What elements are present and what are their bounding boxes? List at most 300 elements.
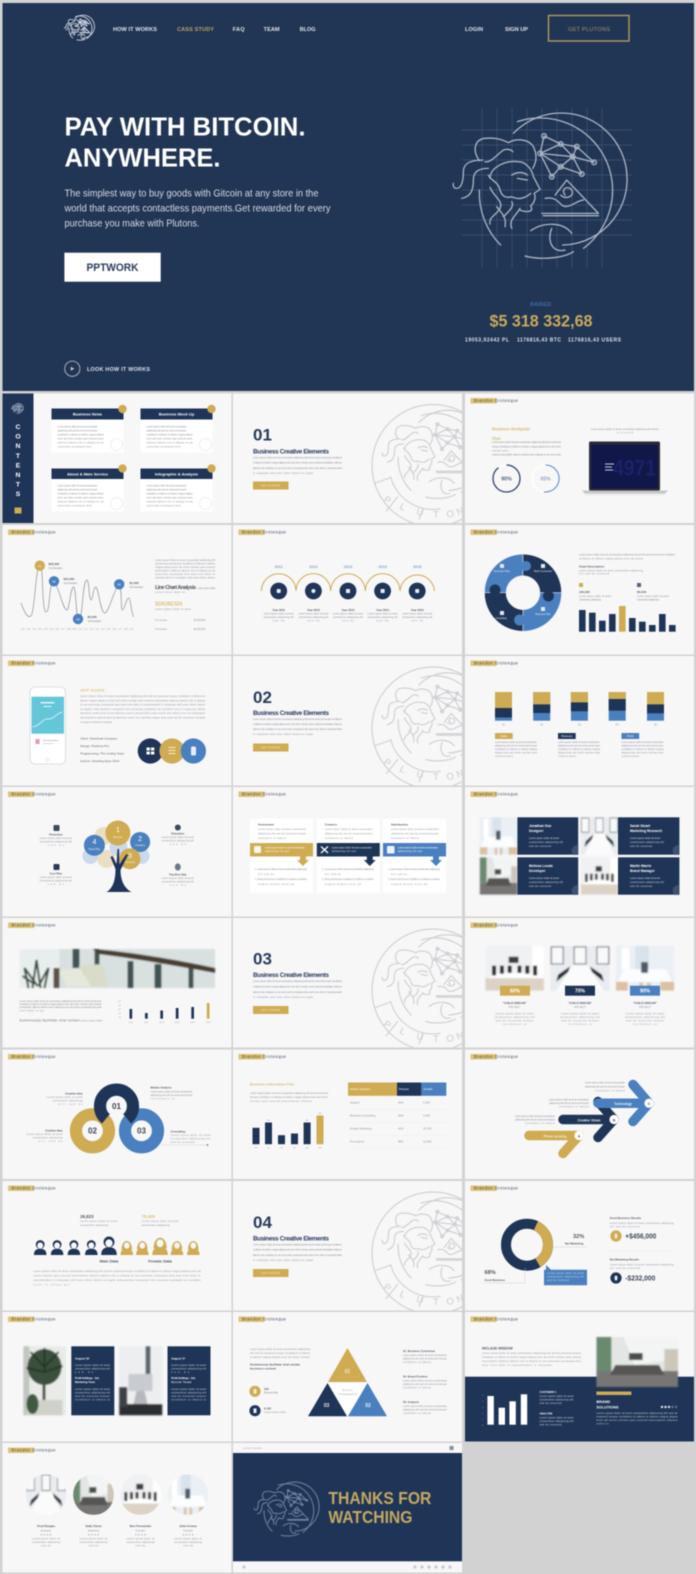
column: creators: incididunt ut labore [325,836,353,840]
hero paragraph: The simplest way to buy goods with Gitcoin at any store in the [64,189,319,200]
result: net marketing: -$232,000 [625,1276,655,1282]
description: reprehenderit in voluptate velit esse cillum dolore eu fugiat nulla pariatur excepteur sint occaecat cupidatat non proident [34,1278,201,1282]
watermark emblem: P [381,1019,393,1031]
team: martin marrix: sed do eiusmod [630,884,653,888]
text card 2: sed do eiusmod tempor [171,1394,206,1398]
bar chart: 06 [319,1148,322,1150]
project: 90 percent: incididunt ut [633,1022,657,1026]
panel: section 03 [232,918,462,1048]
project: 70 percent: incididunt ut [568,1022,592,1026]
callout [544,1265,587,1285]
text card 2: Lorem ipsum dolor sit amet [171,1387,206,1391]
panel: brand solutions slide [465,1312,694,1442]
text card 1: Lorem ipsum dolor sit amet [75,1387,110,1391]
text card 2: consectetur adipiscing elit [171,1366,206,1370]
section description: ut labore et dolore magna aliqua enim ad minim veniam quis nostrud exercitation ullamco [253,984,343,988]
text: arrow c: adipiscing elit sed do eiusmod tempor [585,1084,625,1088]
card: about and main service: Lorem ipsum dolor sit amet consectetur [58,484,98,488]
triangle infographic: Infographics [338,1392,357,1396]
item: education: consectetur adipiscing elit [162,838,194,842]
column: investment: 2. Eiusmod tempor incididunt ut labore et dolore [255,877,308,881]
title: ANYWHERE. [64,145,220,173]
puzzle description: elit sed do eiusmod [579,572,610,576]
column: satisfaction: adipiscing elit sed [398,850,423,853]
contents sidebar: N [16,472,21,479]
text: arrow c: Lorem ipsum dolor sit amet consectetur [585,1080,625,1084]
puzzle description: Lorem ipsum dolor sit amet consectetur adipiscing elit sed do eiusmod tempor incididunt [579,552,675,556]
progress ring 65 [532,465,559,492]
raised total: RAISED [530,302,551,308]
column: creators: adipiscing elit sed do eiusmod tempor [325,832,373,836]
item: education [162,824,194,846]
button: pptwork [64,253,161,282]
panel: three columns slide [233,787,462,916]
item: promotion: sed do [48,843,64,847]
slide header: Brandon Grotesque [12,792,56,796]
interlocking rings: 02 [88,1126,97,1136]
card: infographic and analysis: Lorem ipsum dolor sit amet consectetur [146,484,187,488]
result: good business: Good Business Results [610,1216,642,1220]
label: guideline left [26,1128,63,1143]
watermark emblem: U [415,1294,425,1306]
section title: Business Creative Elements [253,448,329,456]
line chart: 00 01 02 03 04 05 06 07 08 09 10 11 12 13 14 15 16 17 18 19 [21,627,134,631]
project: 60 percent: sed do eiusmod tempor [496,1018,534,1022]
team: melissa locale: Developer [529,869,546,873]
description: Lorem ipsum dolor sit amet consectetur adipiscing elit sed do eiusmod [492,440,562,444]
item: education: Education [171,832,185,836]
item: pay rise stat: consectetur adipiscing elit [162,880,194,884]
intro text [250,1347,311,1370]
section button [253,482,288,490]
heading [492,426,531,441]
result: good business: +$456,000 [625,1234,656,1240]
raised total: $5 318 332,68 [490,313,592,331]
item: business customize: 01. Business Customize [403,1349,435,1353]
year descriptions: sed do [377,618,389,622]
arrow: phone sensing [529,1131,584,1154]
caption [591,427,660,434]
year labels [275,565,421,569]
column: satisfaction: adipiscing elit sed do eiusmod tempor [391,832,439,836]
text: arrow a: adipiscing elit sed do eiusmod tempor [515,1118,555,1122]
section description: in voluptate velit esse cillum dolore eu fugiat [253,1258,313,1262]
text card 1: Marketing Team [75,1380,96,1384]
portrait: sally given: Marketing [88,1528,100,1532]
card: business news: Lorem ipsum dolor sit amet consectetur [58,424,98,428]
stat: right: 80,000 [637,590,647,594]
data table: 42% [398,1126,404,1130]
item: promotion: consectetur adipiscing elit [40,840,72,844]
card: about and main service: About & Main Service [67,472,109,476]
bar chart: 1 [482,1419,484,1421]
panel: arrows slide [465,1050,694,1179]
analysis text: Lorem ipsum dolor sit amet [155,607,191,611]
text card 1: consectetur adipiscing elit [75,1366,110,1370]
project: 90 percent: 90% [640,988,651,994]
line chart: $22,000 [64,577,75,581]
legend: profit: incididunt ut labore et dolore magna [622,747,664,751]
portrait: sally given: ★ ★ ★ ★ [88,1532,100,1536]
app guide description: Lorem ipsum dolor sit amet consectetur adipiscing elit sed do eiusmod tempor incididunt ut labore et [80,694,205,698]
progress ring 90: 90% [501,476,512,482]
panel: thanks slide [233,1443,462,1572]
label: right top: adipiscing elit sed do eiusmod tempor [150,1093,193,1097]
description: Lorem ipsum dolor sit amet consectetur adipiscing elit sed do eiusmod [250,1091,329,1095]
tree infographic: Business [113,837,123,839]
team: sarah stuart [581,817,679,855]
portrait: fred durgan: ★ ★ ★ ★ [40,1532,52,1536]
legend: revenue: Lorem ipsum dolor sit amet consectetur [558,740,600,744]
column: investment: magna aliqua enim ad [258,882,295,886]
project: 60 percent: 60% [510,988,521,994]
text: analysis: Lorem ipsum dolor sit amet [540,1416,574,1420]
section description: ut labore et dolore magna aliqua enim ad minim veniam quis nostrud exercitation ullamco [253,460,343,464]
text: arrow a: incididunt ut labore [525,1121,556,1125]
tree infographic: Company [135,845,146,847]
three circles [138,738,206,764]
panel: stacked bars slide [465,656,694,786]
description: tempor incididunt ut labore et dolore magna aliqua enim ad minim [250,1095,328,1099]
icon: play [65,361,80,376]
column: satisfaction: incididunt ut labore [391,836,420,840]
panel: workplate slide [465,394,694,523]
panel: section 01 [232,393,462,524]
team: jonathan doe: Jonathan Doe [529,824,552,828]
result: net marketing: Net Marketing Results [610,1258,640,1262]
panel: app guide slide [2,656,232,786]
bottom controls [242,1565,452,1569]
item: business customize [403,1349,447,1364]
bar chart: 88 [319,1113,322,1115]
app guide facts: Source: Dowding Apps 2014 [80,759,120,763]
stat: left: Lorem ipsum dolor sit amet [579,594,611,598]
portrait: fred durgan: Lorem ipsum dolor sit [32,1536,60,1540]
item: promotion: Promotion [49,832,63,836]
puzzle description: Lorem ipsum dolor sit amet consectetur adipiscing [579,568,644,572]
item: cost plan [40,864,72,886]
brand solutions [596,1392,678,1426]
bar chart: 01 [255,1148,258,1150]
item: cost plan: Cost Plan [50,872,62,876]
analysis text: Purchase [155,627,168,631]
mini bar chart: 20 [118,1013,122,1015]
slide header: Brandon Grotesque [12,530,56,534]
donut chart [506,1224,548,1266]
photo: plant [23,1346,66,1415]
line chart: $56,000 [48,562,60,566]
column: satisfaction: Lorem ipsum dolor sit amet consectetur [398,846,438,850]
column: investment: elit sed do [258,872,275,876]
watermark emblem: L [398,1289,407,1301]
stat: male: 26,823 [80,1214,94,1219]
card: business news: enim ad minim veniam quis nostrud exerc [58,436,104,440]
team: sarah stuart: sed do eiusmod [630,844,653,848]
analysis text: Line Chart Analysis [155,585,196,591]
data table: 48% [398,1140,404,1144]
watermark emblem: L [398,1026,407,1038]
panel: office photo slide [2,918,232,1048]
legend: profit: aliqua enim ad minim veniam quis [622,750,664,754]
text card 2 [168,1346,210,1415]
label: 68 percent: Good Business [484,1278,505,1282]
hero paragraph: purchase you make with Plutons. [64,219,200,230]
app guide title: APP GUIDE [80,688,105,692]
intro text: business content [250,1366,276,1370]
team: martin marrix: Lorem ipsum dolor sit amet [630,876,660,880]
stacked bar chart: 01 [502,722,505,726]
team: jonathan doe: sed do eiusmod [529,844,552,848]
column: investment: Lorem ipsum dolor sit amet consectetur [265,846,305,850]
result: net marketing [610,1258,674,1284]
card: business mock up: incididunt ut labore et dolore magna aliqua [146,432,193,436]
timeline nodes [270,583,426,599]
legend: sales: adipiscing elit sed do eiusmod tempor [495,744,537,748]
slide header: Brandon Grotesque [12,1186,56,1190]
bar chart: 03 [280,1148,283,1150]
item: education: sed do [170,842,186,846]
puzzle description: ut labore et dolore magna aliqua enim ad minim [579,556,643,560]
description: Lorem ipsum dolor sit amet consectetur adipiscing elit sed do eiusmod tempor [482,1351,581,1355]
year labels: 2011 [275,565,283,569]
analysis text: $100,582.524 [155,602,182,608]
label: right top [150,1086,193,1100]
description: irure dolor in rep [20,1008,44,1012]
line chart: 01 [38,564,42,568]
label: right bottom: Lorem ipsum dolor sit amet [170,1133,211,1137]
triangle infographic: 03 [324,1403,329,1409]
portrait: ben fernandez: consectetur adipiscing [126,1540,155,1544]
raised stats: 1176816,43 BTC [517,338,561,344]
portrait: julie gomez: sed do [183,1544,194,1548]
card: business mock up: ullamco laboris nisi ut aliquip ex ea [146,440,193,444]
label: 68 percent [484,1268,525,1283]
item: analysis [403,1400,447,1415]
office photo [20,949,215,988]
column: satisfaction: Lorem ipsum dolor sit amet consectetur [391,827,439,831]
text card 2: Social Team [171,1380,192,1384]
stacked bar chart: 03 [578,722,581,726]
arrow: creative vision [563,1102,619,1138]
bar chart: 4 [482,1401,484,1403]
hero paragraph: world that accepts contactless payments.Get rewarded for every [64,204,331,215]
bar chart: 05 [306,1148,309,1150]
app guide description: ex ea commodo consequat duis aute irure dolor in reprehenderit in voluptate velit esse cillum dolore [80,703,206,707]
watermark emblem: L [398,764,407,776]
text card 2: Profit Holdings - Job [171,1376,196,1380]
panel: timeline slide [233,525,462,654]
year labels: 2015 [413,565,421,569]
timeline arcs [261,574,434,591]
text: arrow a: Lorem ipsum dolor sit amet consectetur [515,1114,555,1118]
text: customer: Lorem ipsum dolor sit amet [540,1394,574,1398]
description: exercitation ullamco laboris nisi ut aliquip ex ea commodo consequat duis [482,1359,582,1363]
analysis text: commodo consequat duis aute irure dolor in [155,572,216,576]
section description [253,456,343,475]
data table: Percent [399,1087,409,1091]
year descriptions: Lorem ipsum dolor sit amet [298,612,329,616]
title [64,114,306,173]
mini bar chart: 2013 [159,1022,165,1024]
team: sarah stuart: consectetur adipiscing elit [630,840,664,844]
labels: Male Data [100,1258,119,1264]
portrait: ben fernandez: Lorem ipsum dolor sit [126,1536,155,1540]
panel: donut results slide [465,1181,694,1310]
portrait: julie gomez: ★ ★ ★ ★ [182,1532,195,1536]
thanks heading: WATCHING [328,1507,412,1527]
icon: nav logo [64,15,94,40]
section button [253,744,288,752]
contents sidebar: T [16,482,21,488]
section title: Business Creative Elements [253,972,329,979]
panel: rings slide [2,1050,232,1179]
card: business mock up [140,405,216,452]
icon: thanks emblem [254,1482,319,1536]
project: 90 percent: Lorem ipsum dolor sit amet [626,1012,664,1016]
app guide description: et quasi architecto beatae [80,720,113,724]
stat: female: consectetur adipiscing [142,1223,170,1227]
heading: Business Workplate [492,426,531,432]
column: creators: 1. Lorem ipsum dolor sit amet consectetur adipiscing [322,867,374,871]
year descriptions: consectetur adipiscing elit [333,615,363,619]
section number: 01 [253,426,272,444]
top bar: Lorem Ipsum [243,1446,262,1450]
result: net marketing: elit sed do eiusmod [610,1266,640,1270]
bar chart: 68 [267,1120,270,1122]
stacked bar chart: 04 [616,722,619,726]
year descriptions: consectetur adipiscing elit [402,615,432,619]
navigation links: TEAM [264,27,280,33]
line chart: Sub Description [88,619,102,623]
tree infographic: Marketing [125,861,136,864]
contents sidebar: E [16,462,21,469]
text card 1: sed do eiusmod tempor [75,1394,110,1398]
stat: navy: Lorem ipsum dolor [264,1410,286,1414]
label: right bottom: sed do eiusmod [170,1140,195,1144]
text card 1 [71,1346,114,1415]
puzzle donut: Work Connection [534,570,553,573]
description [492,440,562,456]
year descriptions: sed do [307,618,320,622]
column: investment: adipiscing elit sed [265,850,290,853]
slide header: Brandon Grotesque [474,1186,519,1190]
line chart: $5,000 [88,615,97,619]
brand solutions: SOLUTIONS [596,1406,619,1410]
item: pay rise stat: Lorem ipsum dolor sit amet [162,876,194,880]
card: business news: incididunt ut labore et dolore magna aliqua [58,432,104,436]
column: creators: Creators [325,822,337,826]
phone mockup [30,687,66,764]
stat: female: Lorem ipsum dolor sit amet [142,1219,179,1223]
panel: hero [2,3,694,391]
contents sidebar [2,394,34,523]
heading: Plan [492,436,501,441]
team: martin marrix [581,857,679,895]
project: 60 percent: incididunt ut [503,1022,527,1026]
slide header: Brandon Grotesque [12,1054,56,1059]
description: veniam quis [492,448,509,452]
column: satisfaction: magna aliqua enim ad [391,882,428,886]
intro text: Lorem ipsum dolor sit amet consectetur adipiscing [250,1347,311,1351]
portrait: ben fernandez: Founder [136,1528,145,1532]
text: arrow c: incididunt ut labore [595,1088,626,1092]
legend: sales: aliqua enim ad minim veniam quis [495,750,538,754]
stat: navy: $ 100 [264,1406,271,1410]
panel: team grid slide [465,787,694,916]
description: Dominiously facilitate viral certain [20,1018,80,1022]
card: about and main service [52,464,127,512]
panel: team portraits slide [2,1443,232,1572]
item: cost plan: sed do [48,882,64,886]
analysis text: $3,000,000 [194,627,206,631]
watermark emblem: N [455,1293,466,1306]
line chart: 03 [76,617,80,621]
tree infographic: 4 [92,839,96,846]
bar chart: 0 [482,1425,484,1427]
callout: sed do eiusmod [547,1278,570,1282]
progress ring 90 [493,465,520,492]
navigation links: HOW IT WORKS [113,27,157,33]
text card 1: incididunt ut labore et [75,1398,110,1402]
label: right top: incididunt ut [150,1096,175,1100]
data table: Design Marketing [350,1126,372,1130]
portrait: julie gomez: Lorem ipsum dolor sit [174,1536,202,1540]
column: creators: Lorem ipsum dolor sit amet consectetur [325,827,373,831]
data table: Market Segment [350,1087,371,1091]
photo: desk computer [119,1346,162,1415]
column: satisfaction: Satisfaction [391,822,408,826]
project: 70 percent: 70% [575,988,586,994]
raised total [490,302,592,331]
section number: 04 [253,1213,272,1232]
year descriptions: consectetur adipiscing elit [264,615,294,619]
watermark emblem: T [433,1034,439,1045]
watermark emblem [371,666,462,786]
section description: laboris nisi ut aliquip ex ea commodo consequat duis aute irure dolor in reprehenderit [253,727,342,731]
year descriptions: Year 2012 [307,608,320,612]
slide header: Brandon Grotesque [242,792,287,796]
photo: meeting room [596,1337,678,1387]
stat: female [142,1214,179,1227]
legend: sales: nostrud exerc [495,754,514,758]
watermark emblem: P [381,494,393,507]
labels [100,1258,173,1264]
portrait: fred durgan: consectetur adipiscing [32,1540,61,1544]
portrait: ben fernandez: ★ ★ ★ ★ [135,1532,147,1536]
stat: male: Lorem ipsum dolor sit amet [80,1219,117,1223]
project: 60 percent: consectetur adipiscing elit [495,1015,535,1019]
team: sarah stuart: Marketing Research [630,829,662,833]
link: look how it works: LOOK HOW IT WORKS [87,367,150,373]
text: customer [540,1390,574,1405]
text: analysis: sed do eiusmod [540,1422,562,1426]
item: promotion [40,825,72,847]
contents sidebar: S [16,491,21,498]
arrow: technology: C [648,1102,651,1106]
card: business mock up: Business Mock Up [159,412,195,416]
hero paragraph [64,189,331,230]
stacked bar chart [495,692,664,726]
bar chart: 04 [293,1148,296,1150]
portrait: sally given [72,1474,114,1548]
section button [253,1269,288,1277]
panel: child dream slide [465,918,694,1048]
team: martin marrix: consectetur adipiscing elit [630,880,664,884]
portrait: sally given: consectetur adipiscing [80,1540,108,1544]
year descriptions: sed do [411,618,424,622]
stat: left: consectetur adipiscing [579,598,602,602]
laptop mockup: 4971 [613,456,656,480]
